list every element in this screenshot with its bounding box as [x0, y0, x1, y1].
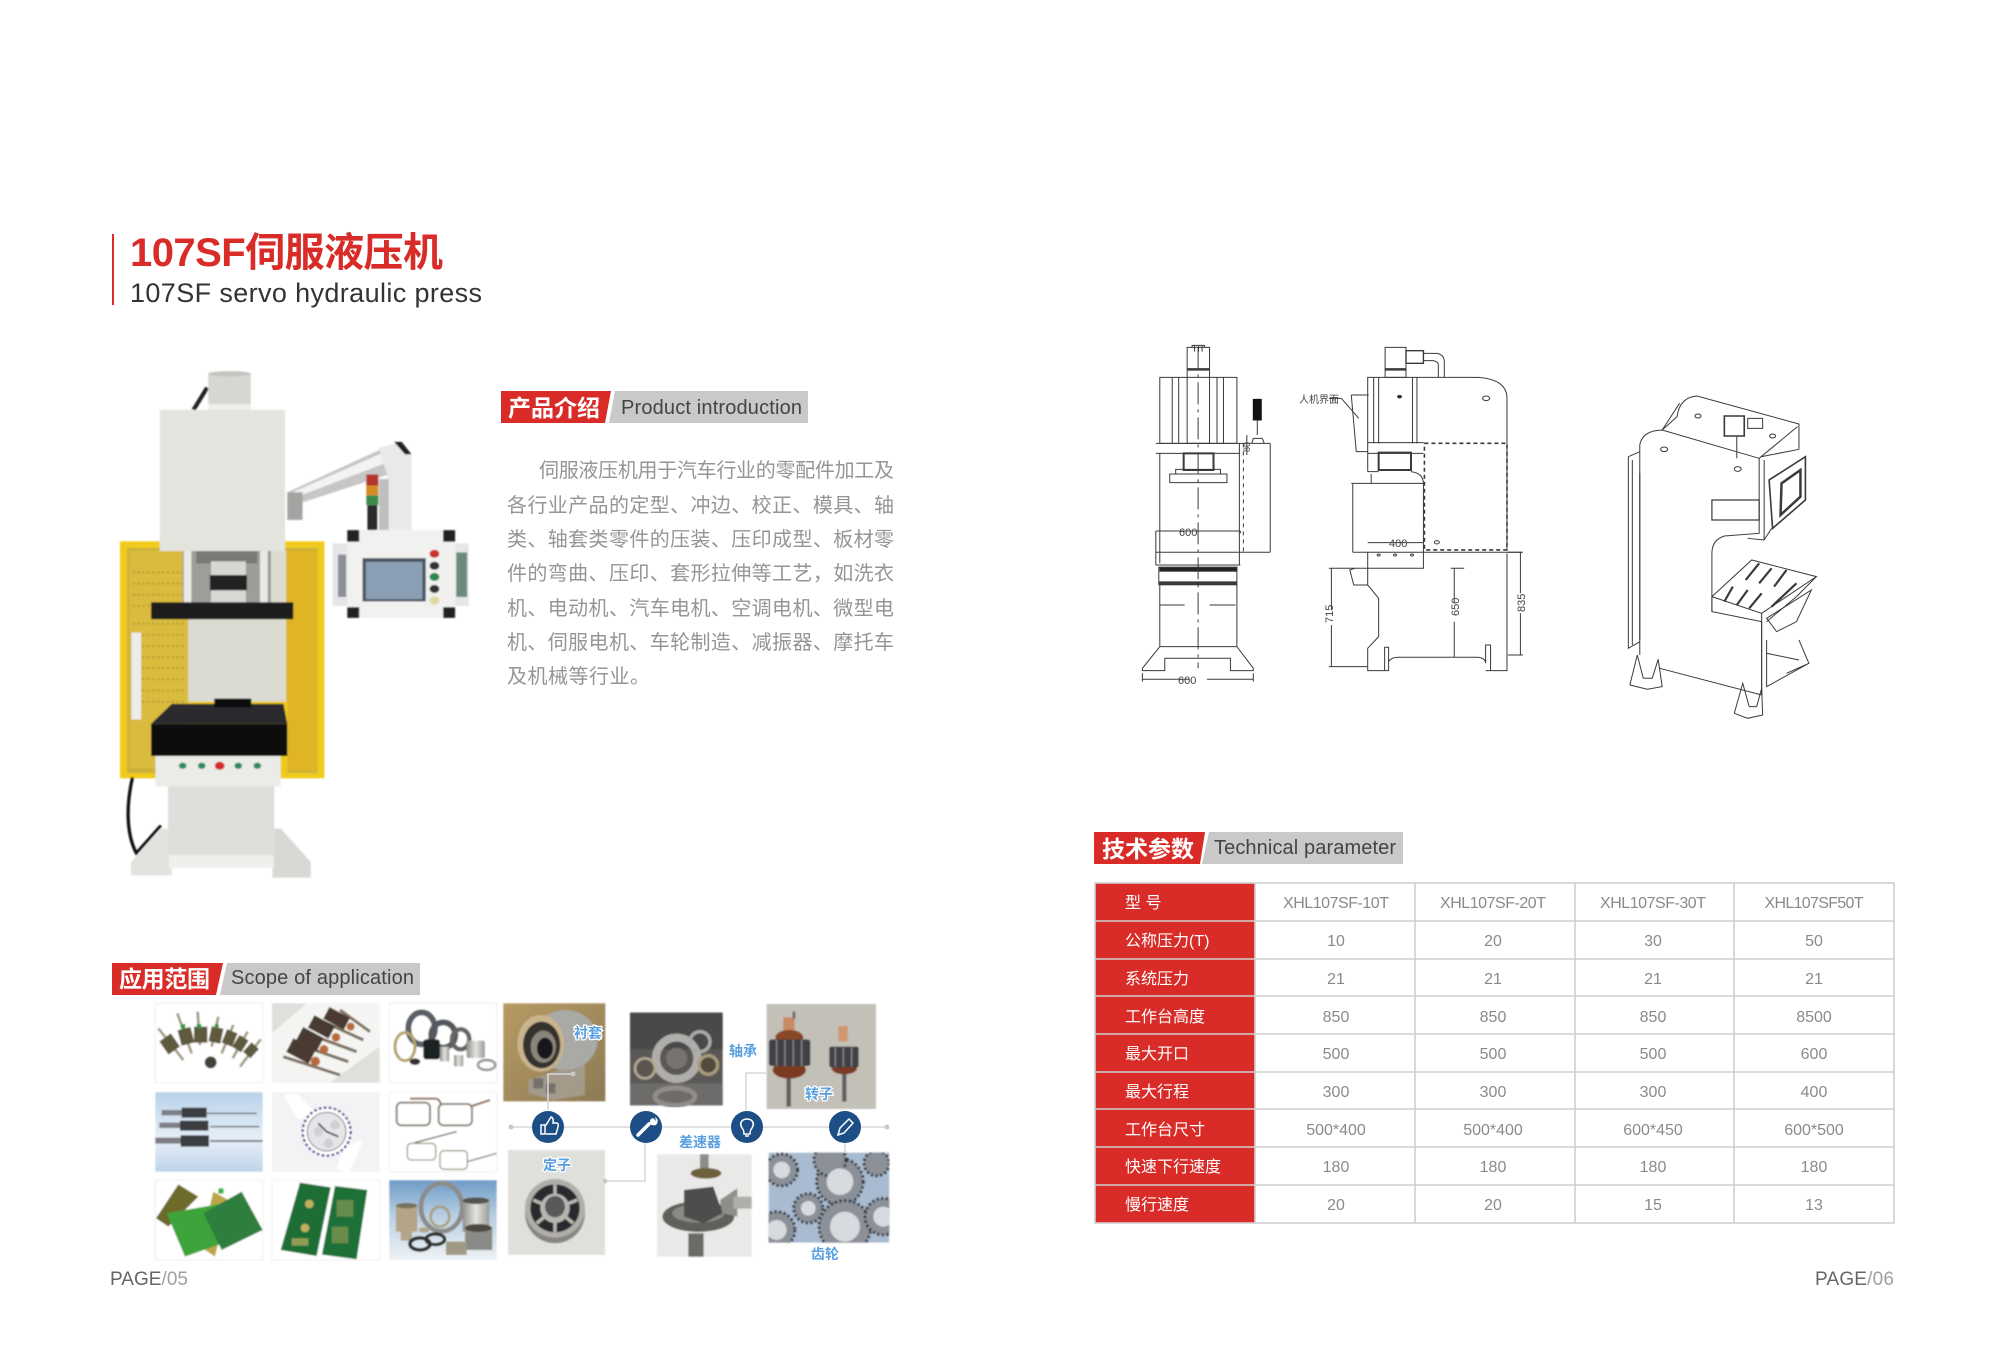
- thumbnail: armatures: [272, 1003, 380, 1083]
- table: technical parameters: 21: [1327, 971, 1345, 988]
- thumbnail: green circuit boards: [272, 1180, 380, 1260]
- callout labels: 差速器: [679, 1134, 721, 1150]
- section tag: product introduction: Product introduction: [621, 397, 802, 419]
- title: chinese: 107SF伺服液压机: [130, 231, 443, 275]
- photo: differential: [657, 1154, 752, 1257]
- table: technical parameters: 20: [1484, 1197, 1502, 1214]
- thumbnail: eyeglasses: [389, 1092, 497, 1172]
- table: technical parameters: 21: [1805, 971, 1823, 988]
- drawing: isometric view: [1628, 396, 1816, 718]
- photo: rotor: [767, 1004, 876, 1109]
- page number: left: PAGE/05: [110, 1269, 188, 1290]
- text block: product introduction: 及机械等行业。: [507, 665, 650, 688]
- callout labels: 转子: [805, 1086, 833, 1102]
- table: technical parameters: 公称压力(T): [1125, 932, 1209, 950]
- callout labels: [543, 1025, 839, 1262]
- table: technical parameters: [1095, 883, 1894, 1223]
- icon: light bulb: [731, 1111, 763, 1143]
- table: technical parameters: 15: [1644, 1197, 1662, 1214]
- photo: bushing: [503, 1003, 605, 1101]
- drawing: dimension labels: 400: [1389, 538, 1407, 550]
- table: technical parameters: 工作台高度: [1125, 1008, 1205, 1026]
- table: technical parameters: 500: [1480, 1046, 1506, 1063]
- table: technical parameters: 500: [1323, 1046, 1349, 1063]
- table: technical parameters: 180: [1640, 1159, 1666, 1176]
- table: technical parameters: 8500: [1796, 1009, 1832, 1026]
- table: technical parameters: 21: [1484, 971, 1502, 988]
- table: technical parameters: 600*500: [1784, 1122, 1844, 1139]
- section tag: technical parameter: Technical parameter: [1214, 837, 1396, 859]
- panel: component timeline: [503, 1003, 902, 1262]
- table: technical parameters: 最大开口: [1125, 1045, 1189, 1063]
- table: technical parameters: 500: [1640, 1046, 1666, 1063]
- photo: servo hydraulic press: [120, 371, 469, 878]
- table: technical parameters: 300: [1480, 1084, 1506, 1101]
- drawing: dimension labels: 650: [1450, 598, 1462, 616]
- callout labels: 衬套: [574, 1025, 602, 1041]
- table: technical parameters: 工作台尺寸: [1125, 1121, 1205, 1139]
- table: technical parameters: 600: [1801, 1046, 1827, 1063]
- table: technical parameters: 13: [1805, 1197, 1823, 1214]
- section tag: product introduction: 产品介绍: [508, 395, 600, 421]
- table: technical parameters: 600*450: [1623, 1122, 1683, 1139]
- table: technical parameters: XHL107SF-20T: [1440, 895, 1546, 912]
- table: technical parameters: XHL107SF-30T: [1600, 895, 1706, 912]
- drawing: side view: [1329, 347, 1523, 671]
- thumbnail: white watch: [272, 1092, 380, 1172]
- callout labels: 轴承: [729, 1043, 757, 1059]
- drawing: front view: [1142, 345, 1270, 682]
- icon: pencil: [829, 1111, 861, 1143]
- title: english: 107SF servo hydraulic press: [130, 278, 482, 308]
- photo: bearing: [630, 1013, 723, 1105]
- table: technical parameters: 10: [1327, 933, 1345, 950]
- table: technical parameters: 180: [1480, 1159, 1506, 1176]
- drawing: dimension labels: [1178, 393, 1528, 687]
- text block: product introduction: 各行业产品的定型、冲边、校正、模具、轴: [507, 494, 894, 517]
- thumbnail: bearings and rings: [389, 1003, 497, 1083]
- photo: stator: [508, 1150, 605, 1255]
- table: technical parameters: 快速下行速度: [1125, 1158, 1221, 1176]
- text block: product introduction: [507, 459, 894, 688]
- callout labels: 定子: [543, 1157, 571, 1173]
- drawing: dimension labels: 人机界面: [1299, 393, 1339, 406]
- table: technical parameters: XHL107SF-10T: [1283, 895, 1389, 912]
- section tag: technical parameter: 技术参数: [1102, 836, 1194, 862]
- table: technical parameters: 850: [1480, 1009, 1506, 1026]
- section tag: scope of application: 应用范围: [119, 966, 210, 992]
- thumbnail: rotors: [155, 1003, 263, 1083]
- thumbnail: bushings: [389, 1180, 497, 1260]
- table: technical parameters: 400: [1801, 1084, 1827, 1101]
- table: technical parameters: 500*400: [1306, 1122, 1366, 1139]
- section tag: product introduction: [501, 391, 808, 423]
- table: technical parameters: 最大行程: [1125, 1083, 1189, 1101]
- title block: [112, 231, 482, 308]
- thumbnail: circuit boards: [155, 1180, 263, 1260]
- text block: product introduction: 件的弯曲、压印、套形拉伸等工艺，如洗衣: [507, 562, 894, 585]
- photo: gears: [768, 1152, 890, 1244]
- page number: right: PAGE/06: [1815, 1269, 1894, 1290]
- table: technical parameters: 20: [1484, 933, 1502, 950]
- icon: thumbs up: [532, 1111, 564, 1143]
- table: technical parameters: 系统压力: [1125, 970, 1189, 988]
- table: technical parameters: 30: [1644, 933, 1662, 950]
- text block: product introduction: 机、电动机、汽车电机、空调电机、微型电: [507, 597, 894, 620]
- table: technical parameters: 型 号: [1125, 894, 1161, 912]
- drawing: dimension labels: 835: [1516, 594, 1528, 612]
- section tag: scope of application: Scope of application: [231, 967, 414, 989]
- text block: product introduction: 类、轴套类零件的压装、压印成型、板材零: [507, 528, 894, 551]
- table: technical parameters: 500*400: [1463, 1122, 1523, 1139]
- text block: product introduction: 伺服液压机用于汽车行业的零配件加工及: [539, 459, 894, 482]
- icon: wrench: [630, 1111, 662, 1143]
- drawing: dimension labels: 715: [1324, 605, 1336, 623]
- table: technical parameters: 慢行速度: [1125, 1196, 1189, 1214]
- section tag: technical parameter: [1094, 832, 1403, 864]
- thumbnail grid: application parts: [155, 1003, 497, 1260]
- table: technical parameters: XHL107SF50T: [1764, 895, 1864, 912]
- text block: product introduction: 机、伺服电机、车轮制造、减振器、摩托车: [507, 631, 894, 654]
- table: technical parameters: 300: [1323, 1084, 1349, 1101]
- table: technical parameters: 850: [1323, 1009, 1349, 1026]
- table: technical parameters: 180: [1801, 1159, 1827, 1176]
- callout labels: 齿轮: [811, 1246, 839, 1262]
- table: technical parameters: 21: [1644, 971, 1662, 988]
- table: technical parameters: 180: [1323, 1159, 1349, 1176]
- drawing: dimension labels: 80: [1242, 442, 1252, 452]
- drawing: dimension labels: 600: [1178, 675, 1196, 687]
- timeline lines: [508, 1072, 890, 1184]
- table: technical parameters: 20: [1327, 1197, 1345, 1214]
- table: technical parameters: 850: [1640, 1009, 1666, 1026]
- thumbnail: shafts: [155, 1092, 263, 1172]
- section tag: scope of application: [112, 963, 420, 995]
- drawing: dimension labels: 600: [1179, 527, 1197, 539]
- table: technical parameters: 300: [1640, 1084, 1666, 1101]
- table: technical parameters: 50: [1805, 933, 1823, 950]
- line drawings: [1142, 345, 1816, 718]
